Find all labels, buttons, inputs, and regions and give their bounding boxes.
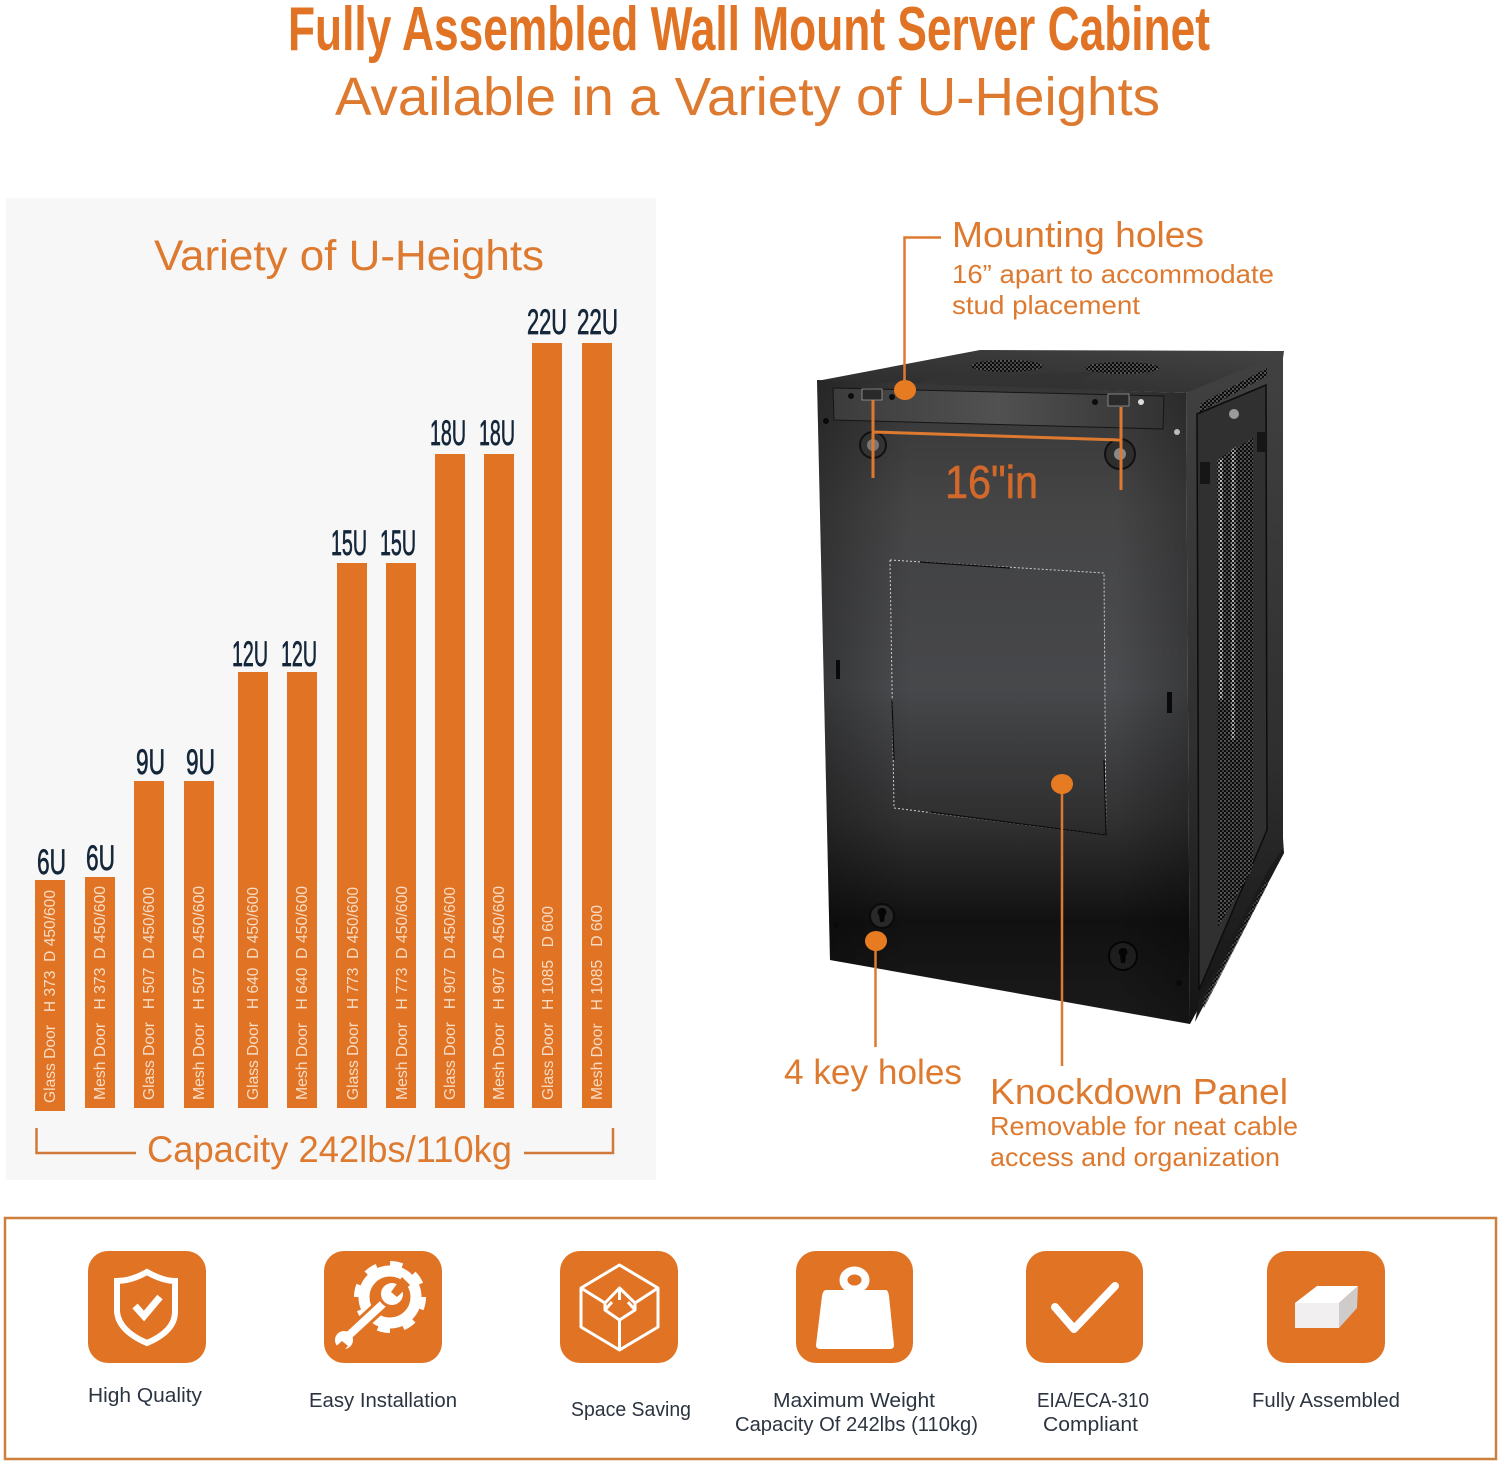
cabinet side [1186, 353, 1284, 1024]
bar: 18U mesh: Mesh Door H 907 D 450/600 [491, 886, 508, 1100]
title [288, 0, 1210, 127]
callout: key holes [784, 931, 962, 1092]
bar: 12U mesh: Mesh Door H 640 D 450/600 [294, 886, 311, 1100]
bar: 22U mesh: 22U [577, 303, 618, 342]
bar: 12U glass: Glass Door H 640 D 450/600 [245, 887, 262, 1100]
bar: 6U mesh [85, 839, 115, 1108]
callout: knockdown panel: Knockdown Panel [990, 1071, 1288, 1112]
feature: maximum weight: Capacity Of 242lbs (110kg) [735, 1414, 978, 1436]
bar: 9U mesh [184, 743, 215, 1108]
feature: maximum weight: Maximum Weight [773, 1390, 935, 1412]
feature: high quality [88, 1251, 206, 1407]
callout: mounting holes: 16” apart to accommodate [952, 259, 1274, 289]
bar: 6U glass [35, 843, 66, 1111]
bar: 22U mesh [577, 303, 618, 1108]
feature: EIA/ECA-310 compliant [1026, 1251, 1149, 1436]
cabinet rear face [817, 380, 1190, 1024]
panel: features [5, 1218, 1496, 1459]
bar: 22U mesh: Mesh Door H 1085 D 600 [589, 905, 606, 1100]
mounting hole measurement: 16"in [945, 456, 1038, 508]
callout: knockdown panel: access and organization [990, 1142, 1280, 1172]
key hole: bottom left [870, 904, 894, 928]
bar: 9U mesh: Mesh Door H 507 D 450/600 [191, 886, 208, 1100]
cabinet illustration [817, 350, 1284, 1024]
feature: space saving: Space Saving [571, 1399, 691, 1421]
bar: 15U glass [331, 524, 367, 1108]
bar: 15U mesh [380, 524, 416, 1108]
top fan vents [918, 360, 1159, 385]
bar: 15U glass: Glass Door H 773 D 450/600 [345, 887, 362, 1100]
callout: mounting holes: Mounting holes [952, 214, 1204, 255]
feature: high quality: High Quality [88, 1385, 202, 1407]
capacity bracket: Capacity 242lbs/110kg [147, 1129, 512, 1170]
callout: knockdown panel [990, 774, 1298, 1172]
feature: easy installation [309, 1251, 457, 1412]
bar: 15U glass: 15U [331, 524, 367, 563]
callout: mounting holes [894, 214, 1274, 400]
bar: 18U mesh: 18U [479, 414, 515, 453]
callout: key holes: 4 key holes [784, 1053, 962, 1092]
bar: 15U mesh: Mesh Door H 773 D 450/600 [394, 886, 411, 1100]
cabinet top face [817, 350, 1284, 393]
bar: 6U mesh: 6U [86, 839, 115, 878]
title: Available in a Variety of U-Heights [335, 67, 1160, 127]
bar: 22U glass [527, 303, 567, 1108]
bar: 18U glass [430, 414, 466, 1108]
bar: 18U glass: 18U [430, 414, 466, 453]
feature: EIA/ECA-310 compliant: EIA/ECA-310 [1037, 1390, 1149, 1412]
bar: 12U mesh [281, 635, 317, 1108]
key hole: top left [860, 432, 886, 458]
mounting band [833, 388, 1164, 429]
capacity bracket [36, 1128, 613, 1170]
feature: fully assembled: Fully Assembled [1252, 1390, 1400, 1412]
feature: easy installation: Easy Installation [309, 1390, 457, 1412]
callout: mounting holes: stud placement [952, 290, 1141, 320]
callout: knockdown panel: Removable for neat cable [990, 1111, 1298, 1141]
bar: 12U glass: 12U [232, 635, 268, 674]
feature: space saving [560, 1251, 691, 1421]
panel: variety of U-heights chart [6, 198, 656, 1180]
bar: 12U mesh: 12U [281, 635, 317, 674]
bar: 9U glass [134, 743, 165, 1108]
bar: 12U glass [232, 635, 268, 1108]
bar: 18U glass: Glass Door H 907 D 450/600 [442, 887, 459, 1100]
bar: 6U glass: 6U [37, 843, 66, 882]
bar: 9U mesh: 9U [186, 743, 215, 782]
bar: 15U mesh: 15U [380, 524, 416, 563]
knockdown panel [890, 560, 1106, 835]
key hole: bottom right [1109, 942, 1137, 970]
bar: 6U glass: Glass Door H 373 D 450/600 [42, 890, 59, 1103]
bar: 22U glass: 22U [527, 303, 567, 342]
feature: fully assembled [1252, 1251, 1400, 1412]
feature: maximum weight [735, 1251, 978, 1436]
bar: 9U glass: 9U [136, 743, 165, 782]
bar: 18U mesh [479, 414, 515, 1108]
mounting hole measurement [873, 400, 1121, 508]
bar: 9U glass: Glass Door H 507 D 450/600 [141, 887, 158, 1100]
key hole: top right [1105, 439, 1135, 469]
small slots and screws [823, 418, 1182, 986]
bar: 22U glass: Glass Door H 1085 D 600 [540, 906, 557, 1100]
chart heading: Variety of U-Heights [154, 232, 544, 280]
bar: 6U mesh: Mesh Door H 373 D 450/600 [92, 886, 109, 1100]
feature: EIA/ECA-310 compliant: Compliant [1043, 1414, 1138, 1436]
